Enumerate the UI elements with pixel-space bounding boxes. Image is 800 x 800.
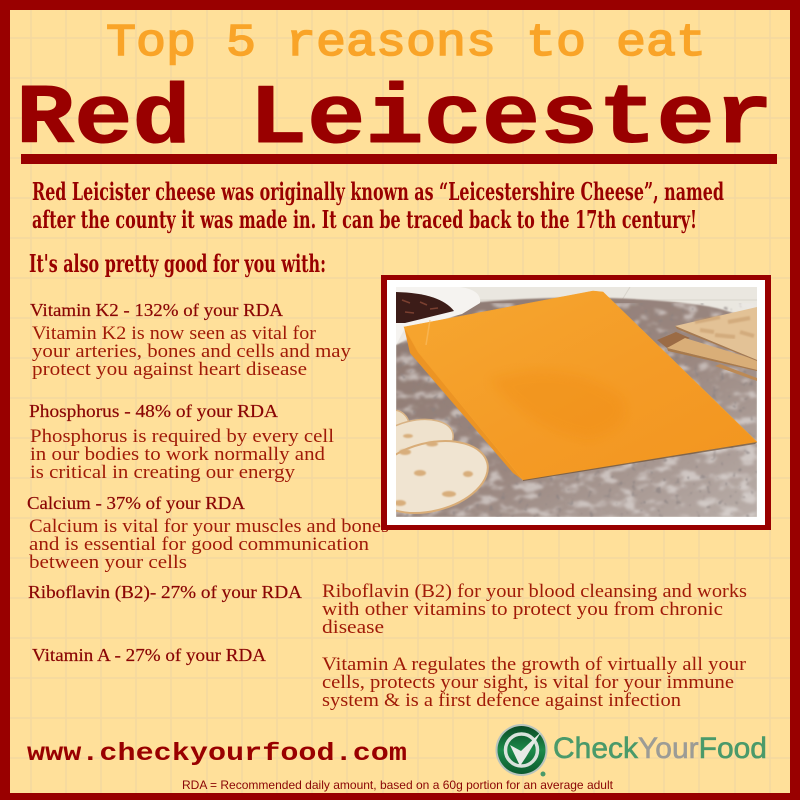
section: Riboflavin: disease: [322, 617, 384, 638]
title: top line: Top 5 reasons to eat: [106, 18, 706, 69]
bowl of chutney: [396, 287, 480, 345]
subheading: It's also pretty good for you with:: [29, 249, 326, 278]
section: Phosphorus: Phosphorus - 48% of your RDA: [29, 401, 278, 421]
granite board: [396, 298, 757, 517]
section: Phosphorus: in our bodies to work normally and: [30, 444, 326, 465]
crackers right: [657, 332, 690, 348]
section: Phosphorus: Phosphorus is required by every cell: [30, 426, 334, 447]
section: Calcium: [27, 493, 389, 573]
section: Vitamin K2: Vitamin K2 - 132% of your RDA: [30, 300, 283, 320]
section: Calcium: Calcium is vital for your muscles and bones: [29, 516, 389, 537]
title rule: [21, 154, 777, 164]
section: Riboflavin: Riboflavin (B2)- 27% of your RDA: [28, 582, 302, 603]
section: Riboflavin: Riboflavin (B2) for your blood cleansing and works: [322, 581, 747, 602]
section: Vitamin A: system & is a first defence against infection: [322, 690, 682, 711]
section: Phosphorus: is critical in creating our energy: [30, 462, 296, 483]
section: Riboflavin: with other vitamins to protect you from chronic: [322, 599, 723, 620]
section: Vitamin K2: [30, 300, 352, 380]
section: Calcium: Calcium - 37% of your RDA: [27, 493, 245, 513]
section: Riboflavin: [28, 581, 747, 638]
website url: www.checkyourfood.com: [27, 739, 407, 768]
section: Vitamin A: [32, 645, 747, 711]
cheese wedge: [404, 328, 522, 480]
title: Red Leicester: Red Leicester: [16, 73, 773, 168]
section: Vitamin A: Vitamin A regulates the growth of virtually all your: [322, 654, 747, 675]
footnote: RDA = Recommended daily amount, based on a 60g portion for an average adult: [182, 778, 614, 792]
section: Calcium: between your cells: [29, 552, 187, 573]
icon: check badge: [496, 724, 548, 776]
cheese photo: [365, 275, 771, 530]
section: Vitamin K2: Vitamin K2 is now seen as vital for: [32, 323, 317, 344]
section: Vitamin A: Vitamin A - 27% of your RDA: [32, 645, 266, 665]
logo: [496, 724, 767, 776]
section: Calcium: and is essential for good communication: [29, 534, 370, 555]
section: Vitamin A: cells, protects your sight, is vital for your immune: [322, 672, 734, 693]
section: Phosphorus: [29, 401, 334, 483]
intro text: [32, 177, 724, 234]
crackers left: [396, 410, 409, 425]
logo wordmark: CheckYourFood: [553, 732, 767, 765]
section: Vitamin K2: your arteries, bones and cells and may: [32, 341, 352, 362]
section: Vitamin K2: protect you against heart disease: [32, 359, 307, 380]
